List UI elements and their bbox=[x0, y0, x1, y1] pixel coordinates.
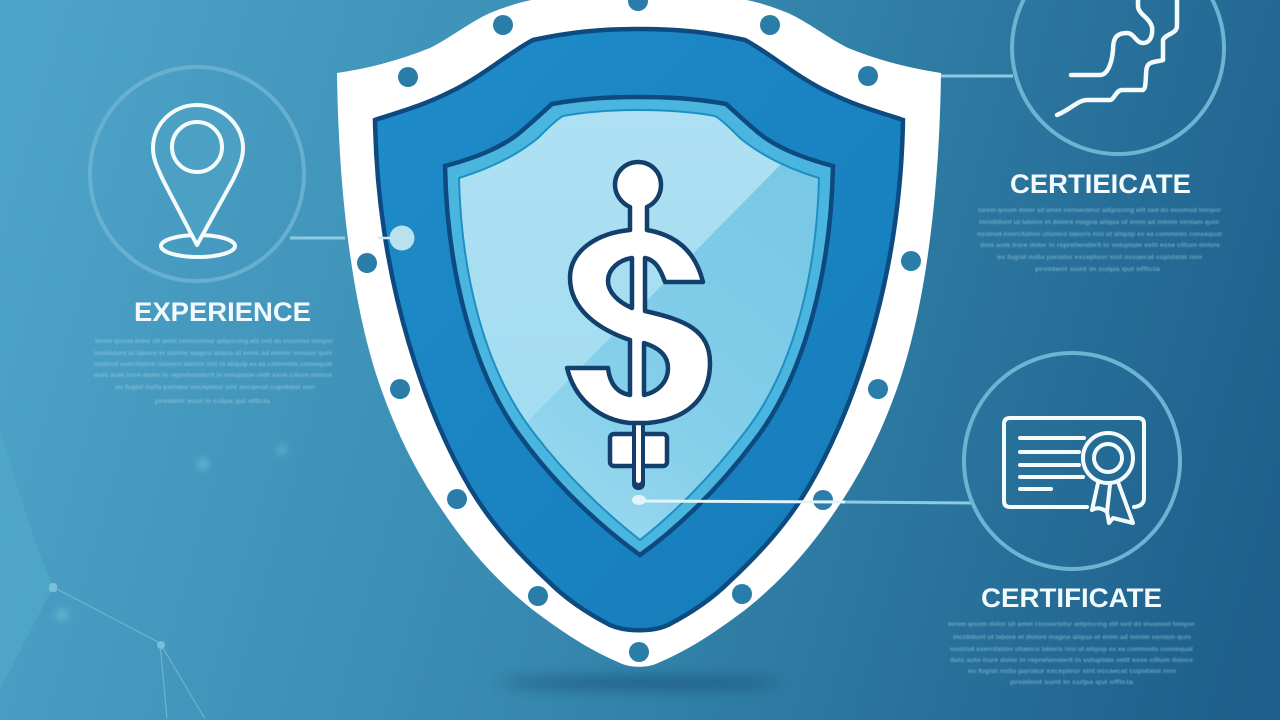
panel: certificate bottom right bbox=[948, 353, 1195, 686]
decorative network, bottom left bbox=[0, 430, 287, 719]
lower boxes bbox=[610, 434, 667, 466]
bottom connector bbox=[632, 495, 973, 505]
panel: certificate top right bbox=[977, 0, 1224, 273]
text block: experience bbox=[94, 338, 333, 405]
shield inner frame bbox=[445, 97, 833, 555]
text block: experience: eu fugiat nulla pariatur excepteur sint occaecat cupidatat non bbox=[115, 384, 315, 391]
dollar sign icon bbox=[567, 162, 710, 490]
heading: experience: EXPERIENCE bbox=[134, 297, 311, 327]
panel: experience bbox=[90, 67, 333, 405]
dollar outline bbox=[567, 162, 710, 423]
left connector line bbox=[290, 236, 345, 240]
shield bbox=[337, 0, 941, 667]
text block: certificate top: duis aute irure dolor in reprehenderit in voluptate velit esse cillum dolore bbox=[980, 242, 1220, 249]
text block: experience: lorem ipsum dolor sit amet consectetur adipiscing elit sed do eiusmod tempor bbox=[95, 338, 333, 345]
icon: certificate with seal bbox=[1004, 418, 1144, 523]
text block: certificate top: lorem ipsum dolor sit amet consectetur adipiscing elit sed do eiusmod tempor bbox=[978, 207, 1221, 214]
text block: certificate bottom: proident sunt in culpa qui officia bbox=[1010, 679, 1133, 686]
heading: certificate bottom: CERTIFICATE bbox=[981, 583, 1162, 613]
text block: certificate top: proident sunt in culpa qui officia bbox=[1035, 266, 1160, 273]
heading: certificate top: CERTIEICATE bbox=[1010, 169, 1191, 199]
connector node on the left bbox=[378, 226, 414, 250]
shield glass panel bbox=[460, 111, 818, 539]
rim dots bbox=[357, 0, 921, 662]
text block: certificate top: eu fugiat nulla pariatur excepteur sint occaecat cupidatat non bbox=[997, 254, 1202, 261]
text block: certificate top bbox=[977, 207, 1223, 273]
text block: certificate top: incididunt ut labore et dolore magna aliqua ut enim ad minim veniam quis bbox=[979, 219, 1219, 226]
top right ring bbox=[1012, 0, 1224, 154]
top right connector line bbox=[925, 74, 1013, 78]
shield blue band bbox=[375, 29, 903, 630]
text block: experience: proident sunt in culpa qui officia bbox=[155, 398, 270, 405]
text block: certificate bottom: lorem ipsum dolor sit amet consectetur adipiscing elit sed do eiusmod tempor bbox=[948, 621, 1195, 628]
ground shadow bbox=[500, 677, 780, 689]
text block: certificate bottom bbox=[948, 621, 1195, 686]
text block: certificate bottom: duis aute irure dolor in reprehenderit in voluptate velit esse cillum dolore bbox=[950, 657, 1193, 664]
text block: certificate top: nostrud exercitation ullamco laboris nisi ut aliquip ex ea commodo consequat bbox=[977, 231, 1223, 238]
shield white rim bbox=[337, 0, 941, 667]
text block: experience: nostrud exercitation ullamco laboris nisi ut aliquip ex ea commodo consequat bbox=[94, 361, 333, 368]
icon: wavy lines bbox=[1057, 0, 1177, 115]
text block: certificate bottom: eu fugiat nulla pariatur excepteur sint occaecat cupidatat non bbox=[968, 668, 1176, 675]
text block: certificate bottom: incididunt ut labore et dolore magna aliqua ut enim ad minim veniam quis bbox=[953, 634, 1191, 641]
lower stem bbox=[632, 420, 645, 490]
text block: certificate bottom: nostrud exercitation ullamco laboris nisi ut aliquip ex ea commodo consequat bbox=[950, 646, 1194, 653]
icon: location pin bbox=[153, 105, 243, 257]
bottom right ring bbox=[964, 353, 1180, 569]
text block: experience: duis aute irure dolor in reprehenderit in voluptate velit esse cillum dolore bbox=[94, 372, 332, 379]
text block: experience: incididunt ut labore et dolore magna aliqua ut enim ad minim veniam quis bbox=[94, 350, 332, 357]
experience ring bbox=[90, 67, 304, 281]
